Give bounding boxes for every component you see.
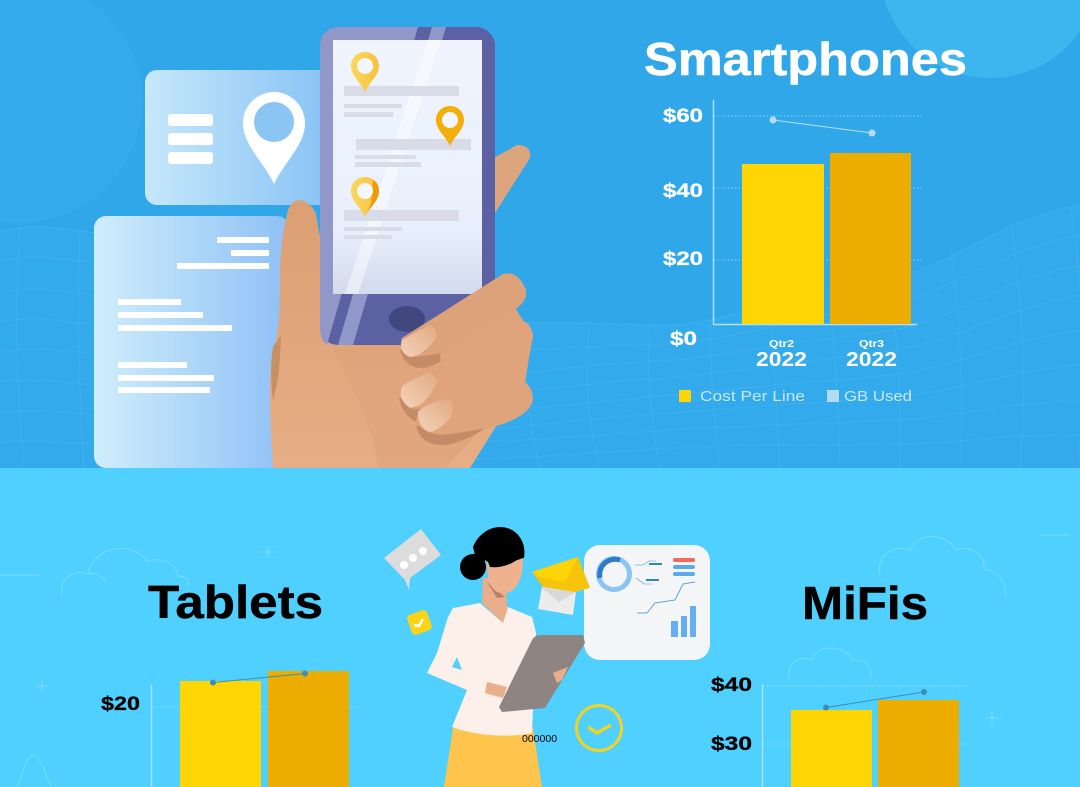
info card with location pin [145,70,335,205]
y axis labels: $0 [670,329,697,350]
finger nails [401,325,436,357]
envelope icon [532,557,590,615]
x axis labels [756,339,897,371]
map pin 1 [351,52,379,92]
chart: MiFis [711,675,970,787]
line chart [637,582,695,613]
woman with tablet [427,527,585,787]
donut chart [598,558,630,590]
map pin 3 [351,177,379,217]
mini bars [671,621,678,637]
y axis labels: $40 [663,181,703,202]
y axis label: $20 [101,694,140,715]
bar: Qtr2 2022 [742,164,824,324]
legend: Cost Per Line [700,388,805,405]
hand back finger [490,145,530,213]
top background panel [0,0,1080,468]
neck [482,578,508,623]
hand palm and thumb [270,200,500,468]
fingers on tablet [553,667,568,683]
face [486,545,523,593]
x axis labels: Qtr2 [769,339,795,350]
map pin 2 [436,106,464,146]
title: MiFis: MiFis [802,577,928,629]
y axis labels: $40 [711,675,752,696]
legend: GB Used [844,388,912,405]
skirt [444,728,542,787]
y axis labels: $30 [711,734,752,755]
hair [473,527,524,570]
line: MiFis GB Used [823,689,927,710]
y axis labels: $20 [663,249,703,270]
line: Tablets GB Used [210,670,308,686]
bar: Tablets Qtr2 [180,681,261,787]
bottom background panel [0,468,1080,787]
x axis labels: Qtr3 [859,339,885,350]
x axis labels: 2022 [846,349,897,371]
dashboard card [584,545,710,660]
legend [679,388,912,405]
y axis labels [663,106,703,350]
title: Smartphones: Smartphones [644,33,967,85]
bar: MiFis Qtr2 [791,710,872,787]
blouse [427,603,536,736]
bar: Tablets Qtr3 [268,671,349,787]
y axis labels [711,675,752,755]
background cloud outlines [0,535,1070,787]
yellow check badge icon [406,609,433,636]
background wave mesh [0,205,1080,468]
chart: Tablets [101,670,358,787]
smartphone [320,27,495,345]
legend stripes [673,558,695,562]
bar: MiFis Qtr3 [878,700,959,787]
line: GB Used [770,116,876,136]
text card [94,216,288,468]
y axis labels: $60 [663,106,703,127]
clock check icon [576,706,622,750]
speech bubble icon [384,529,441,590]
chart: Smartphones [663,100,923,405]
bar: Qtr3 2022 [830,153,911,324]
tablet device [499,635,585,712]
list rows on phone screen [344,86,471,239]
x axis labels: 2022 [756,349,807,371]
title: Tablets: Tablets [148,576,323,628]
fingers holding phone [399,273,533,445]
hand on tablet [485,682,507,698]
placeholder label: 000000 [522,733,557,745]
